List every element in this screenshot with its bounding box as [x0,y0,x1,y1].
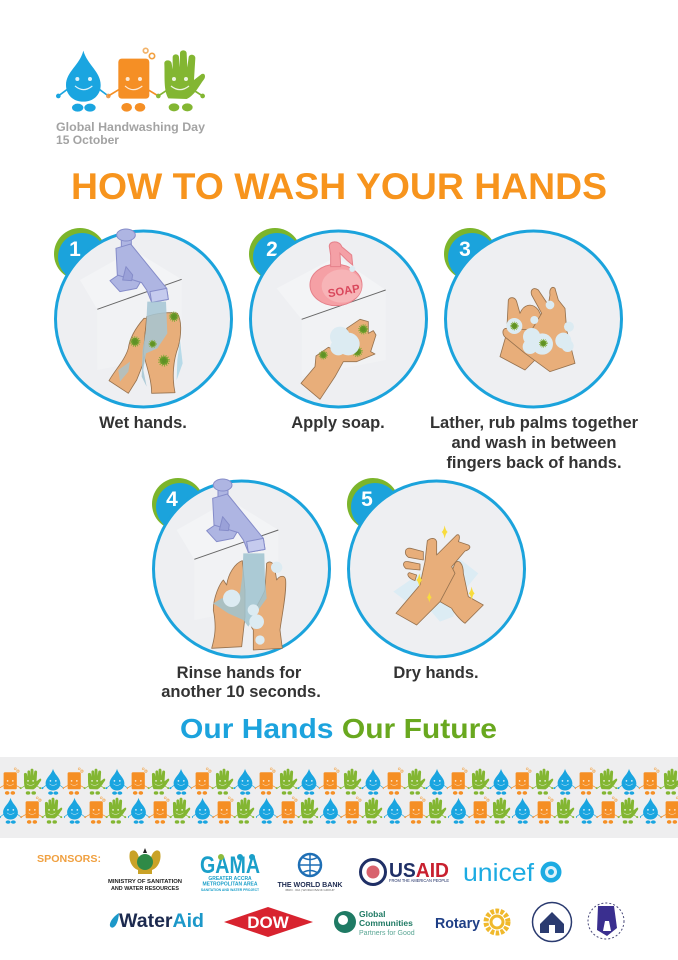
mascots holding hands [56,48,205,112]
illustration: faucet rinsing hands [177,479,286,650]
badge 2 [249,228,301,281]
logo: Rotary: Rotary [435,915,481,932]
slogan: Our Hands Our Future [180,713,497,744]
caption 3: and wash in between [451,434,617,452]
badge 1: 1 [69,238,81,261]
logo: Global Communities: Global [359,909,385,919]
logo: GAMA: METROPOLITAN AREA [202,882,258,888]
logo caption: Global Handwashing Day [56,120,205,134]
panel: step 1 wet hands [54,228,232,432]
logo: Rotary [435,911,508,933]
badge 4: 4 [166,488,178,511]
logo: GAMA: GREATER ACCRA [208,876,252,882]
logo: DOW: DOW [247,913,290,932]
mascot band [0,757,678,838]
illustration: lathering hands [500,287,575,372]
caption 4: another 10 seconds. [161,683,321,701]
caption 4 [161,664,321,701]
caption 3 [430,414,639,472]
logo: USAID: USAID [389,860,449,882]
panel: step 5 dry [347,478,524,682]
badge 2: 2 [266,238,278,261]
soap bottle: SOAP [327,283,361,300]
illustration circle 4 [154,481,330,657]
panel: step 2 apply soap [249,228,426,432]
logo: DOW [224,907,313,937]
logo: Ministry of Sanitation and Water Resources: AND WATER RESOURCES [111,886,179,892]
panel: step 4 rinse [152,478,330,701]
caption 3: Lather, rub palms together [430,414,639,432]
logo: Ministry of Sanitation and Water Resources [108,848,182,892]
caption 1: Wet hands. [99,414,187,432]
illustration: soap dispenser and hand [277,242,386,399]
logo: GAMA: GAMA [200,852,260,879]
illustration circle 2 [250,231,426,407]
badge 4 [152,478,204,531]
badge 5 [347,478,399,531]
mascot row 1 [0,760,678,797]
panel: step 3 lather [430,228,639,472]
logo: GAMA: SANITATION AND WATER PROJECT [201,888,260,892]
logo caption [56,120,205,147]
logo: Ghana seal [588,903,624,939]
badge 3 [444,228,496,281]
logo: The World Bank [278,854,343,892]
illustration: hands drying with towel [393,525,483,625]
caption 5: Dry hands. [393,664,479,682]
logo: Community Water and Sanitation Agency seal [532,902,572,942]
badge 5: 5 [361,488,373,511]
mascot row 2 [0,789,678,826]
logo: Global Communities: Communities [359,918,413,928]
logo: WaterAid: WaterAid [119,911,204,932]
caption 4: Rinse hands for [177,664,302,682]
logo: UNICEF: unicef [463,859,534,887]
logo caption: 15 October [56,133,119,147]
logo: Ministry of Sanitation and Water Resources: MINISTRY OF SANITATION [108,879,182,885]
logo: UNICEF [463,859,562,887]
logo: USAID [360,860,449,884]
illustration: faucet and hands under water [80,229,183,393]
title: HOW TO WASH YOUR HANDS [71,166,607,207]
badge 3: 3 [459,238,471,261]
soap bottle [310,242,362,306]
logo: GAMA [200,852,260,892]
badge 1 [54,228,106,281]
logo: Global Communities [334,909,415,937]
illustration circle 5 [348,481,524,657]
illustration circle 3 [446,231,622,407]
logo: Global Communities: Partners for Good [359,930,415,937]
logo: The World Bank: IBRD · IDA | WORLD BANK GROUP [285,888,335,892]
logo: USAID: FROM THE AMERICAN PEOPLE [389,878,449,883]
logo: The World Bank: THE WORLD BANK [278,880,343,889]
logo: Global Handwashing Day [56,48,205,147]
caption 3: fingers back of hands. [446,454,622,472]
illustration circle 1 [56,231,232,407]
sponsors label: SPONSORS: [37,853,101,865]
caption 2: Apply soap. [291,414,385,432]
